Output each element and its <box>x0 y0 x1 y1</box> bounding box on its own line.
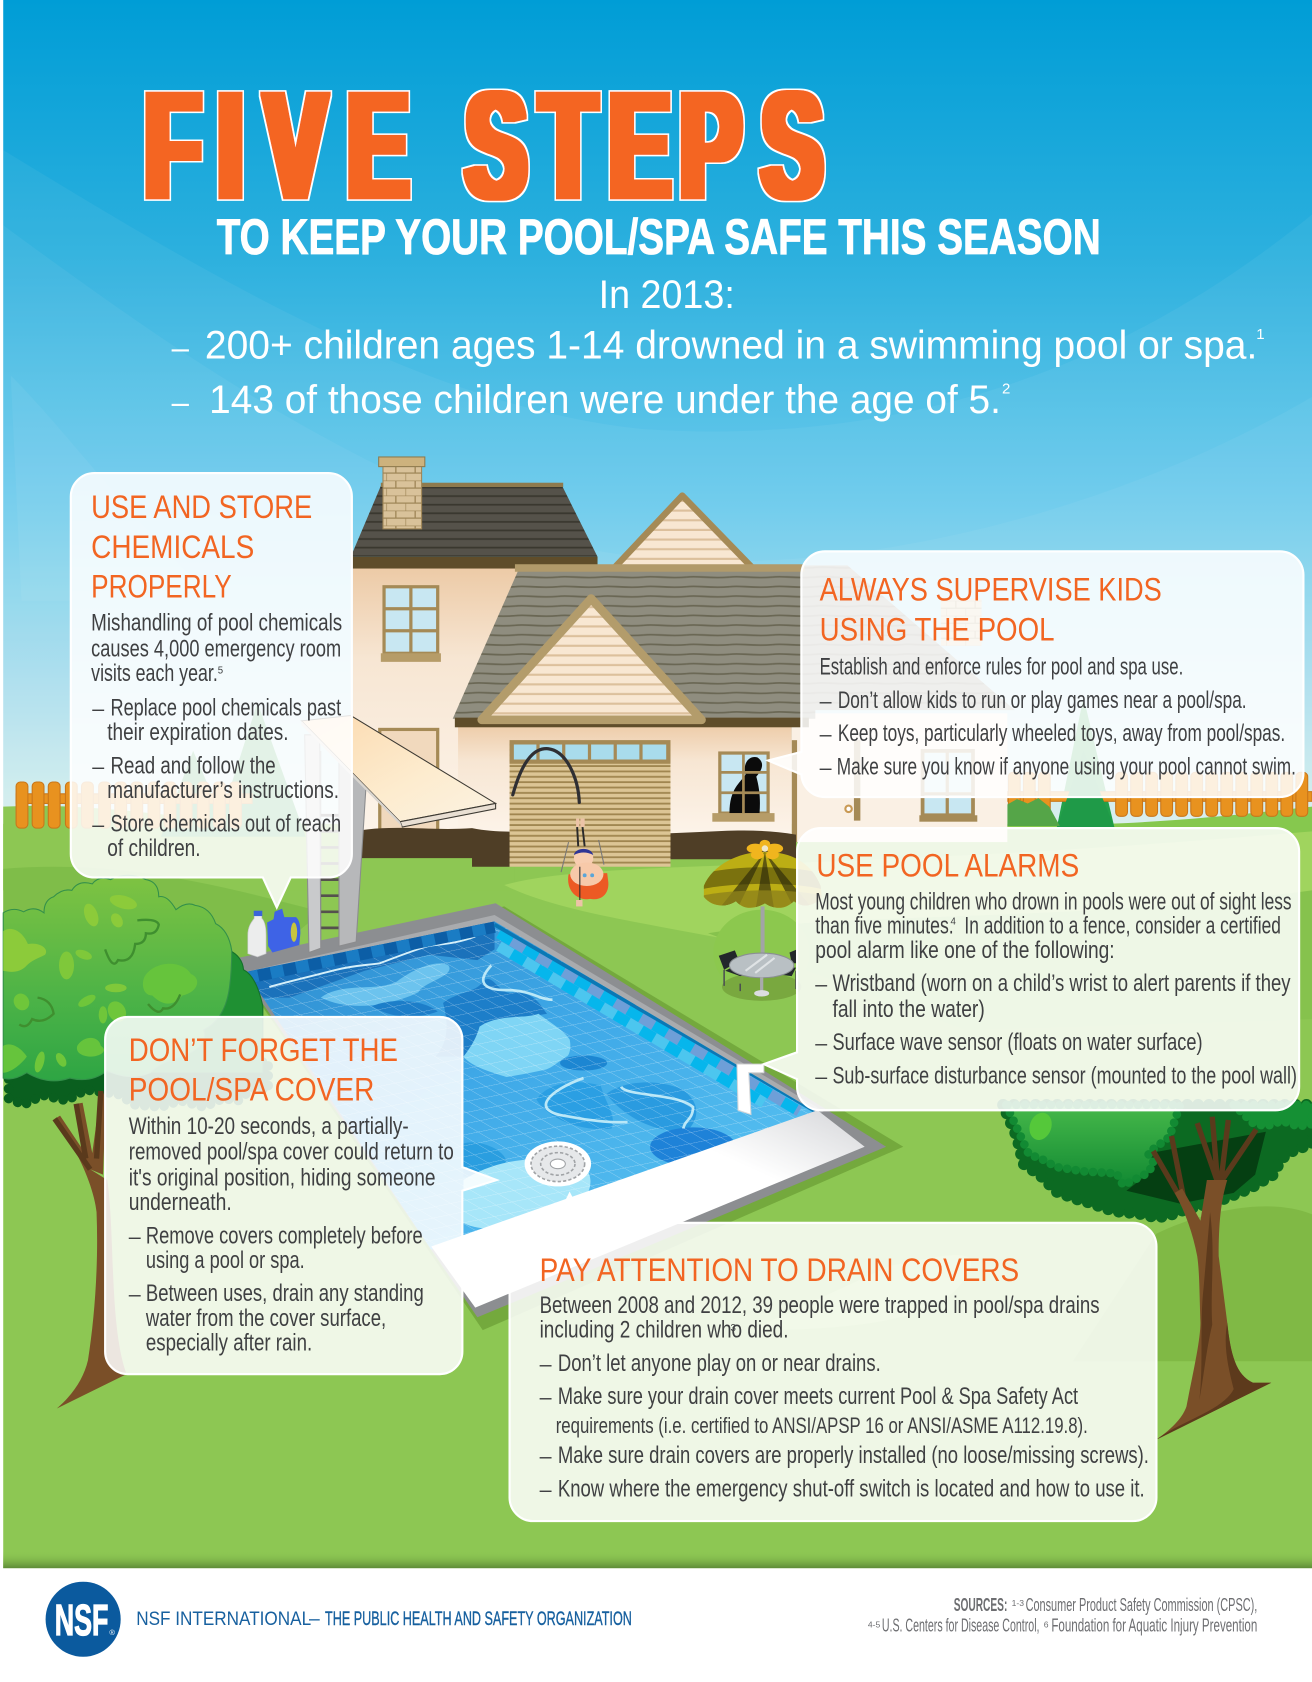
statistics block: 143 of those children were under the age of 5. <box>209 378 1001 422</box>
pool: inner coping <box>246 915 824 1283</box>
body text: drain: – <box>540 1444 552 1468</box>
heading: supervise: ALWAYS SUPERVISE KIDS <box>820 571 1162 608</box>
house: right wing behind callout <box>792 565 1015 842</box>
panel: pool/spa cover <box>105 1017 497 1374</box>
diving board: plank <box>301 715 496 827</box>
body text: drain: including 2 children who died. <box>540 1317 788 1344</box>
body text: drain <box>540 1292 1149 1502</box>
house: chimney <box>379 457 425 529</box>
pool: far wall alternate tiles <box>246 927 495 978</box>
body text: chemicals: – <box>92 696 104 720</box>
umbrella flower <box>747 840 783 859</box>
body text: alarms: – <box>815 1064 827 1088</box>
heading: chemicals: CHEMICALS <box>91 528 254 565</box>
house: foundation <box>353 828 796 867</box>
statistics block <box>172 273 1265 422</box>
body text: chemicals: 5 <box>218 666 223 677</box>
body text: chemicals: Mishandling of pool chemicals <box>91 610 342 637</box>
left tree trunk <box>55 1091 127 1408</box>
right tree <box>1003 1105 1312 1440</box>
body text: chemicals: – <box>92 754 104 778</box>
organization tagline <box>136 1608 632 1630</box>
house: door <box>375 729 441 855</box>
body text: alarms: – <box>815 1031 827 1055</box>
heading: chemicals: USE AND STORE <box>91 488 312 525</box>
body text: chemicals: Read and follow the <box>110 752 276 779</box>
chemical bottles <box>248 909 300 957</box>
NSF logo: NSF <box>55 1596 108 1645</box>
speech bubble: chemicals <box>71 473 352 908</box>
left foliage curly lines <box>19 920 180 1026</box>
panel: always supervise kids <box>768 551 1303 797</box>
background: cone tree in front of fence <box>1057 751 1115 828</box>
house: garage <box>510 740 670 867</box>
left tree branches <box>55 1091 101 1169</box>
title <box>145 60 1101 265</box>
statistics block: – <box>172 385 190 420</box>
umbrella canopy <box>704 840 822 908</box>
statistics block: – <box>172 330 190 365</box>
statistics block: 200+ children ages 1-14 drowned in a swimming pool or spa. <box>205 323 1257 367</box>
pool: water and tiles <box>247 922 815 1250</box>
body text: drain: Between 2008 and 2012, 39 people were trapped in pool/spa drains <box>540 1292 1100 1319</box>
umbrella pole <box>761 906 765 960</box>
blue jug <box>267 909 300 953</box>
pool: far wall tile row <box>246 927 495 978</box>
organization tagline: THE PUBLIC HEALTH AND SAFETY ORGANIZATION <box>325 1608 632 1630</box>
body text: supervise: – <box>820 722 832 746</box>
pool: drain <box>525 1141 591 1186</box>
body text: alarms: than five minutes. <box>815 912 954 939</box>
white bottle <box>248 911 266 957</box>
body text: supervise: – <box>820 755 832 779</box>
body text: cover: using a pool or spa. <box>146 1247 305 1274</box>
pool: right wall tile row inner alternate <box>499 946 764 1103</box>
body text: alarms: Surface wave sensor (floats on water surface) <box>832 1029 1203 1056</box>
table and chairs <box>719 949 797 997</box>
body text: chemicals: visits each year. <box>91 660 218 687</box>
pool: ground shadow <box>238 906 903 1330</box>
house <box>351 457 1015 867</box>
panel: use and store chemicals <box>71 473 352 908</box>
NSF logo <box>46 1582 121 1657</box>
body text: drain: – <box>540 1385 552 1409</box>
right branches <box>1153 1117 1256 1207</box>
body text: drain: Make sure your drain cover meets current Pool & Spa Safety Act <box>558 1383 1078 1410</box>
body text: alarms: fall into the water) <box>832 996 985 1023</box>
panel: use pool alarms <box>764 828 1299 1110</box>
background: sky wave highlights <box>3 150 1312 858</box>
body text: chemicals: manufacturer’s instructions. <box>107 777 339 804</box>
body text: drain: – <box>540 1477 552 1501</box>
house: upper roof <box>351 483 598 569</box>
pool: far wall shade <box>246 921 495 998</box>
lawn <box>3 806 1312 1568</box>
house: window with silhouette <box>712 753 775 822</box>
heading: chemicals <box>91 488 312 604</box>
sources: 6 <box>1044 1619 1049 1629</box>
pool: grey deck edge <box>238 903 886 1317</box>
right foliage front left <box>1006 1105 1180 1185</box>
heading: cover: POOL/SPA COVER <box>129 1071 374 1108</box>
sources: U.S. Centers for Disease Control, <box>882 1615 1040 1636</box>
background: cone trees <box>161 697 1115 837</box>
heading: chemicals: PROPERLY <box>91 567 232 604</box>
pool: rim shade line <box>495 925 815 1111</box>
pool: water patterns <box>321 963 736 1229</box>
heading: supervise <box>820 571 1162 647</box>
body text: cover: it's original position, hiding someone <box>129 1164 436 1191</box>
organization tagline: NSF INTERNATIONAL <box>136 1609 311 1630</box>
pool: white cover rolled back <box>431 1110 865 1308</box>
speech bubble: cover <box>105 1017 497 1374</box>
body text: drain: Don’t let anyone play on or near drains. <box>558 1350 881 1377</box>
body text: cover: – <box>129 1224 141 1248</box>
heading: cover <box>129 1031 398 1108</box>
heading: drain: PAY ATTENTION TO DRAIN COVERS <box>540 1251 1019 1288</box>
left foliage main <box>3 875 232 1081</box>
body text: cover: water from the cover surface, <box>145 1305 386 1332</box>
pool: waterline <box>269 936 475 987</box>
body text: cover: removed pool/spa cover could return to <box>129 1139 454 1166</box>
diving board: stand and ladder <box>305 735 367 953</box>
right trunk shading <box>1156 1212 1271 1440</box>
body text: chemicals: their expiration dates. <box>107 719 289 746</box>
left foliage rear <box>107 916 263 1073</box>
body text: drain: 3 <box>731 1323 736 1334</box>
body text: supervise: – <box>820 689 832 713</box>
body text: supervise <box>820 654 1296 780</box>
body text: chemicals: – <box>92 812 104 836</box>
sources: 4-5 <box>868 1619 881 1629</box>
right foliage front right <box>1234 1105 1312 1126</box>
background: hedge behind house wing <box>1007 798 1060 826</box>
body text: cover: Within 10-20 seconds, a partially- <box>129 1113 409 1140</box>
body text: alarms: pool alarm like one of the following: <box>815 937 1115 964</box>
statistics block: 1 <box>1256 326 1265 343</box>
left tree <box>3 875 268 1408</box>
house: upper window <box>381 587 441 662</box>
diving board <box>301 715 496 953</box>
body text: chemicals: Store chemicals out of reach <box>110 810 341 837</box>
speech bubble: drain <box>510 1194 1156 1521</box>
body text: cover <box>129 1113 454 1357</box>
title: FIVE STEPS: FIVE <box>145 60 409 231</box>
heading: cover: DON’T FORGET THE <box>129 1031 398 1068</box>
body text: drain: Know where the emergency shut-off switch is located and how to use it. <box>558 1475 1145 1502</box>
panel: drain covers <box>510 1194 1156 1521</box>
title: FIVE STEPS: STEPS <box>466 60 823 231</box>
left foliage highlights <box>3 892 197 1073</box>
right foliage dark layer <box>1003 1105 1312 1218</box>
footer background <box>0 1568 1312 1682</box>
body text: alarms: – <box>815 972 827 996</box>
title: FIVE STEPS <box>145 60 823 231</box>
heading: supervise: USING THE POOL <box>820 610 1055 647</box>
lawn circle under table <box>713 910 810 995</box>
pool: right wall tile row outer alternate <box>499 933 799 1111</box>
pool: alarm sensor <box>737 1064 764 1115</box>
organization tagline: – <box>309 1609 320 1630</box>
body text: cover: Remove covers completely before <box>146 1222 423 1249</box>
body text: drain: requirements (i.e. certified to ANSI/APSP 16 or ANSI/ASME A112.19.8). <box>556 1413 1088 1438</box>
table shadow <box>722 973 801 1001</box>
diving child <box>561 818 608 906</box>
footer <box>0 1568 1312 1682</box>
statistics block: 2 <box>1002 381 1010 398</box>
sources: 1-3 <box>1012 1598 1024 1608</box>
heading: alarms: USE POOL ALARMS <box>816 846 1079 883</box>
body text: cover: Between uses, drain any standing <box>146 1280 424 1307</box>
right foliage highlight <box>1026 1110 1055 1143</box>
left tree dark under-canopy <box>9 1062 268 1107</box>
swimming pool <box>215 901 903 1330</box>
sources: SOURCES: <box>954 1594 1007 1615</box>
body text: drain: Make sure drain covers are properly installed (no loose/missing screws). <box>558 1442 1149 1469</box>
speech bubble: alarms <box>764 828 1299 1110</box>
right foliage inner shade <box>1126 1132 1266 1204</box>
statistics block: In 2013: <box>599 273 735 317</box>
body text: cover: underneath. <box>129 1189 232 1216</box>
house: front gable <box>482 599 702 720</box>
body text: chemicals: of children. <box>107 835 201 862</box>
background: sky <box>3 0 1312 847</box>
house: lower wall <box>458 721 792 837</box>
umbrella and table <box>697 840 826 1001</box>
body text: chemicals <box>91 610 342 862</box>
body text: alarms: 4 <box>950 917 956 928</box>
body text: alarms <box>815 889 1297 1089</box>
house: lower roof <box>453 564 815 727</box>
body text: chemicals: causes 4,000 emergency room <box>91 635 341 662</box>
background: right fence <box>1007 772 1312 816</box>
body text: cover: especially after rain. <box>146 1330 312 1357</box>
pool: right wall tile row outer <box>499 933 799 1111</box>
house: rear gable <box>614 496 753 569</box>
sources <box>868 1594 1257 1636</box>
speech bubble: supervise <box>768 551 1303 797</box>
body text: cover: – <box>129 1282 141 1306</box>
NSF logo: ® <box>109 1628 115 1637</box>
house: upper wall <box>353 563 525 837</box>
body text: drain: – <box>540 1352 552 1376</box>
body text: chemicals: Replace pool chemicals past <box>110 694 341 721</box>
pool: right wall tile row inner <box>499 946 764 1103</box>
jump arc <box>513 749 579 802</box>
background: left fence <box>16 782 252 828</box>
right trunk <box>1156 1180 1271 1440</box>
